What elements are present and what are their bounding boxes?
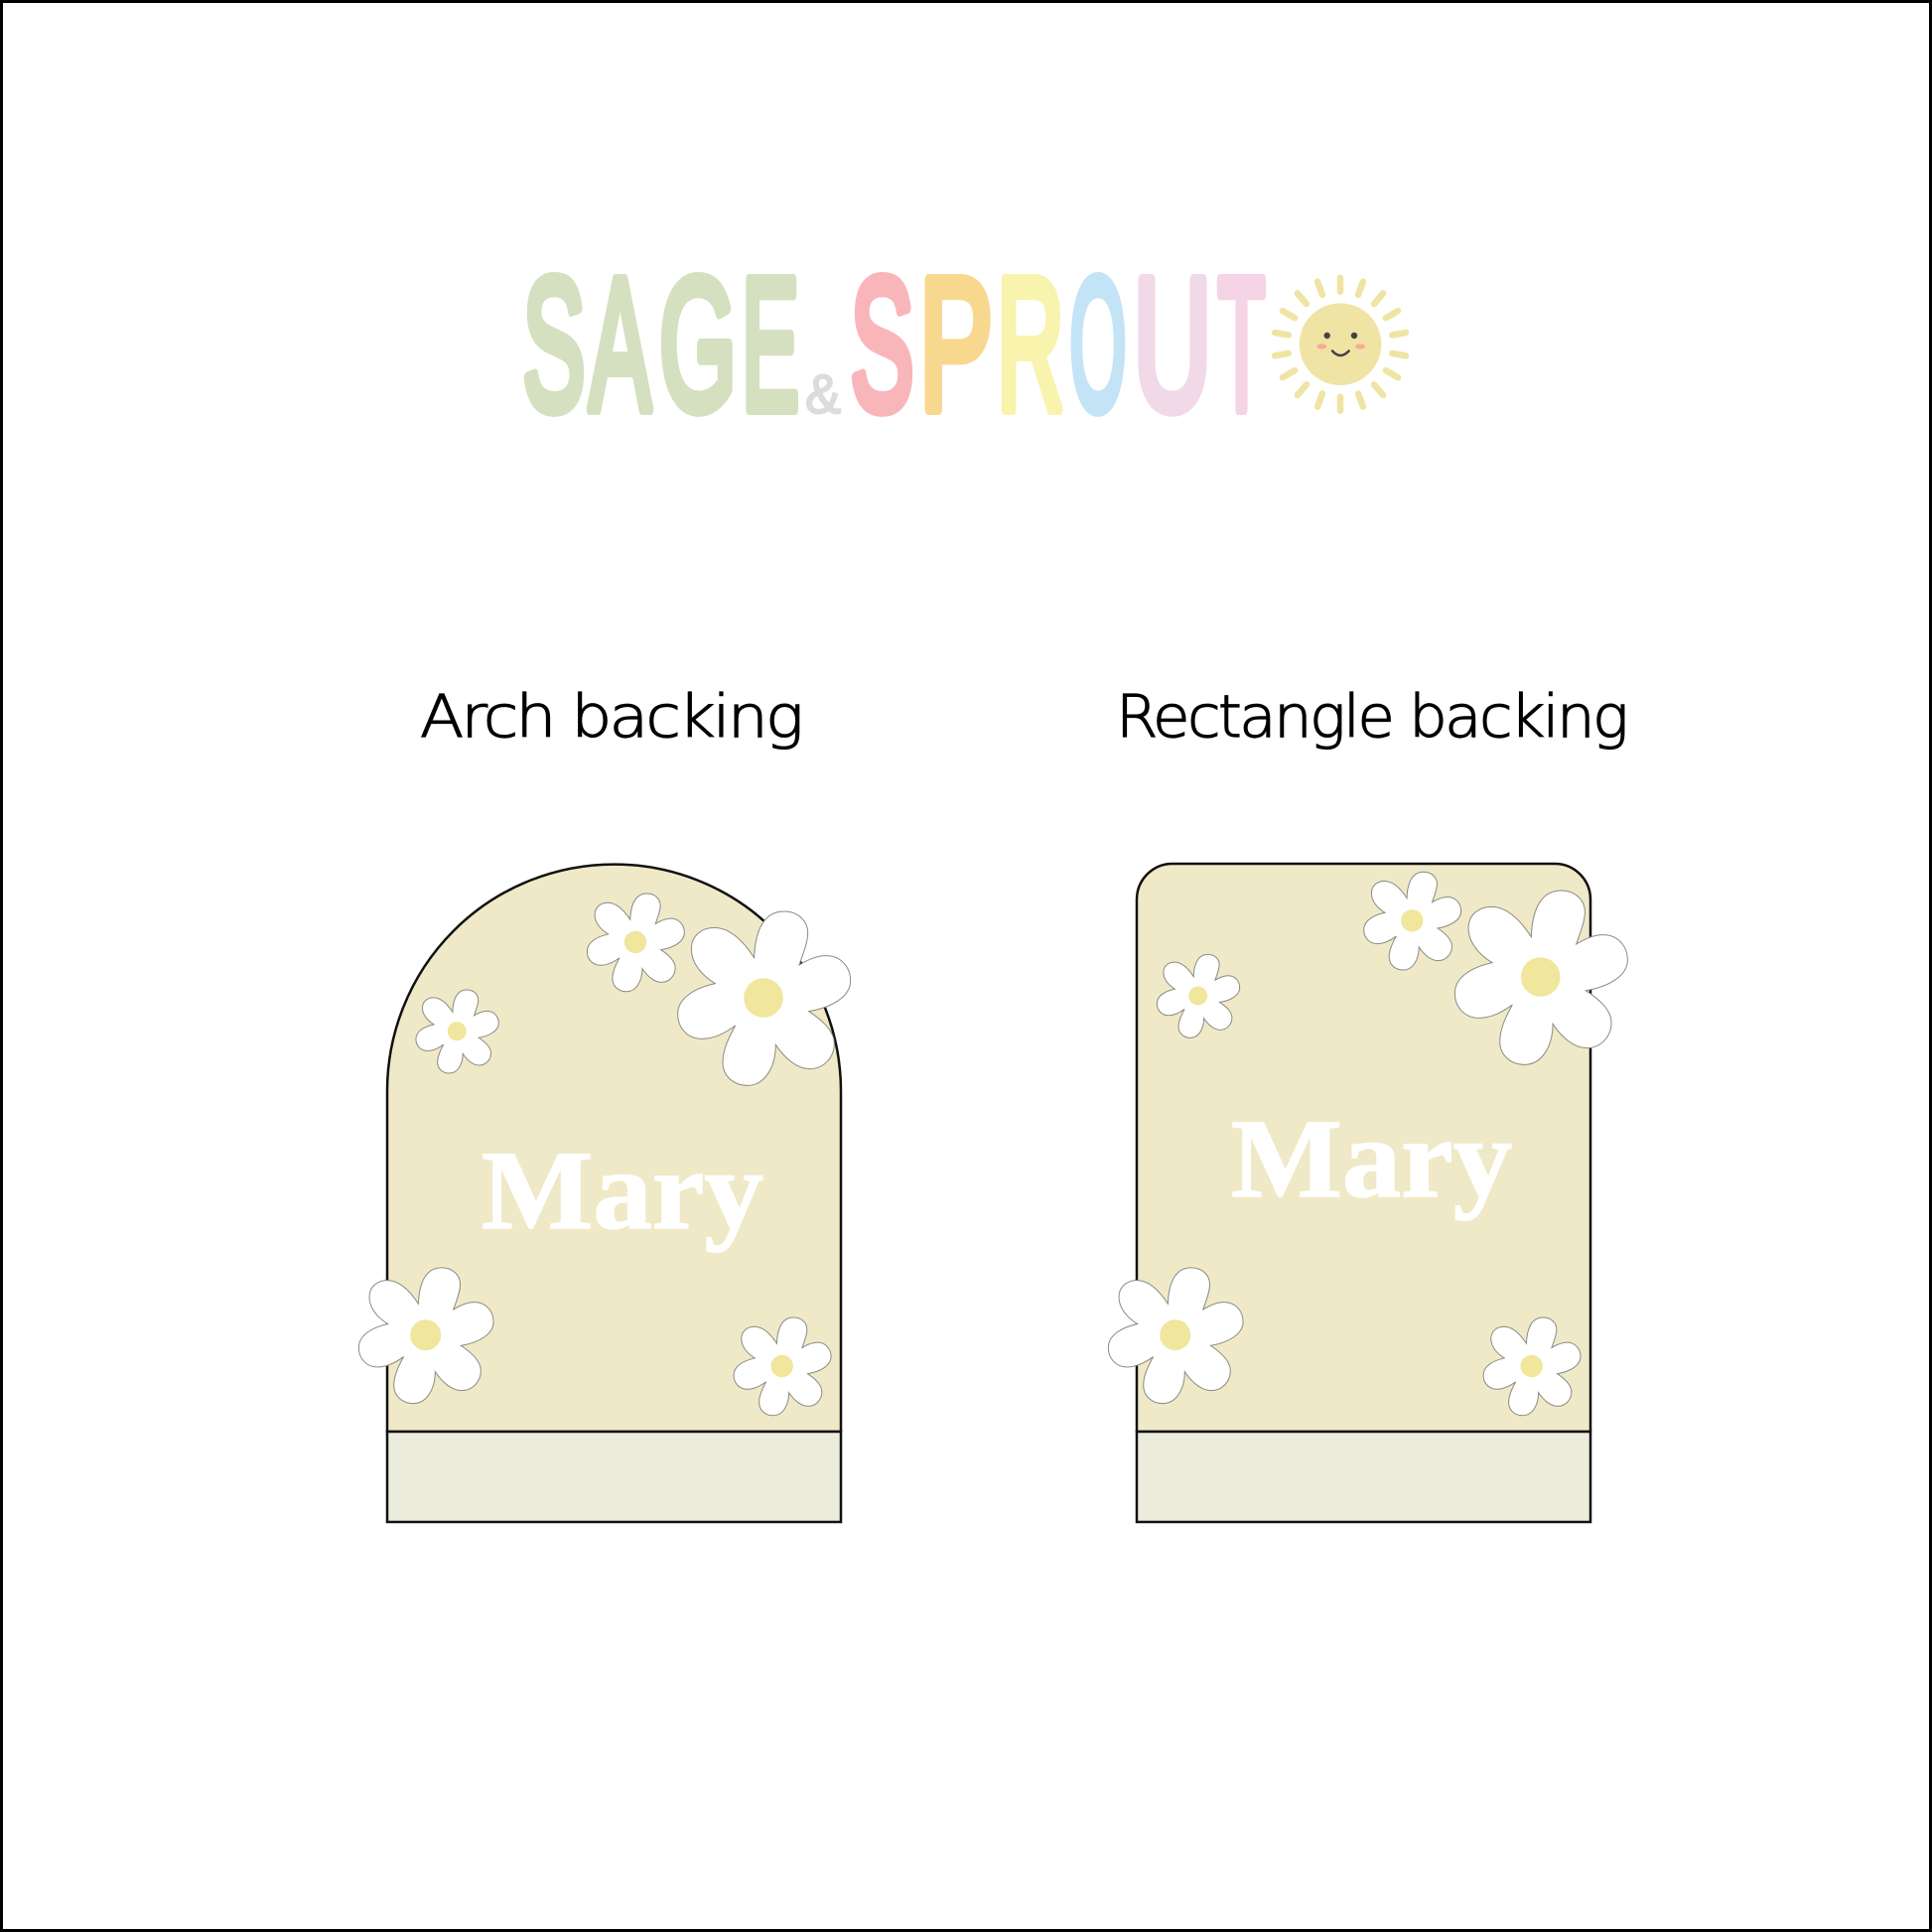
logo word: SAGE: G [659,240,737,450]
logo word: SPROUT: S [850,240,913,450]
logo ampersand: & [805,362,841,425]
logo word: SAGE [522,240,799,450]
rectangle flower: large top right [1454,891,1627,1064]
heading: arch backing: Arch backing [420,682,801,751]
rectangle backing shape [1137,864,1590,1432]
panel: arch backing sign [358,865,851,1522]
logo word: SPROUT: R [997,240,1064,450]
arch flower: medium bottom right [734,1317,831,1416]
logo word: SPROUT: U [1134,240,1211,450]
logo word: SPROUT [850,240,1265,450]
arch flower: medium top [587,894,684,992]
arch base block [387,1432,841,1522]
logo word: SPROUT: O [1070,240,1126,450]
arch flower: large bottom left [358,1268,493,1404]
sun rays [1275,278,1406,411]
logo: Sage & Sprout [522,240,1406,450]
heading: rectangle backing: Rectangle backing [1116,682,1626,751]
logo: Sage & Sprout: T [1217,240,1265,450]
logo: Sage & Sprout: E [742,240,799,450]
sun disc [1300,303,1381,385]
arch name text: Mary [482,1129,763,1253]
logo word: SPROUT: P [919,240,993,450]
arch backing shape [387,865,841,1432]
logo word: SAGE: A [590,240,651,450]
arch flower: large top right [678,911,851,1085]
arch flower: small left [416,990,498,1073]
panel: rectangle backing sign [1108,864,1627,1522]
icon: smiling sun [1275,278,1406,411]
logo word: SAGE: S [522,240,586,450]
rectangle flower: medium top [1364,872,1461,970]
rectangle flower: small left [1157,954,1240,1037]
rectangle base block [1137,1432,1590,1522]
sun face [1316,333,1365,355]
rectangle flower: medium bottom right [1483,1317,1581,1416]
rectangle name text: Mary [1231,1097,1512,1221]
rectangle flower: large bottom left [1108,1268,1243,1404]
